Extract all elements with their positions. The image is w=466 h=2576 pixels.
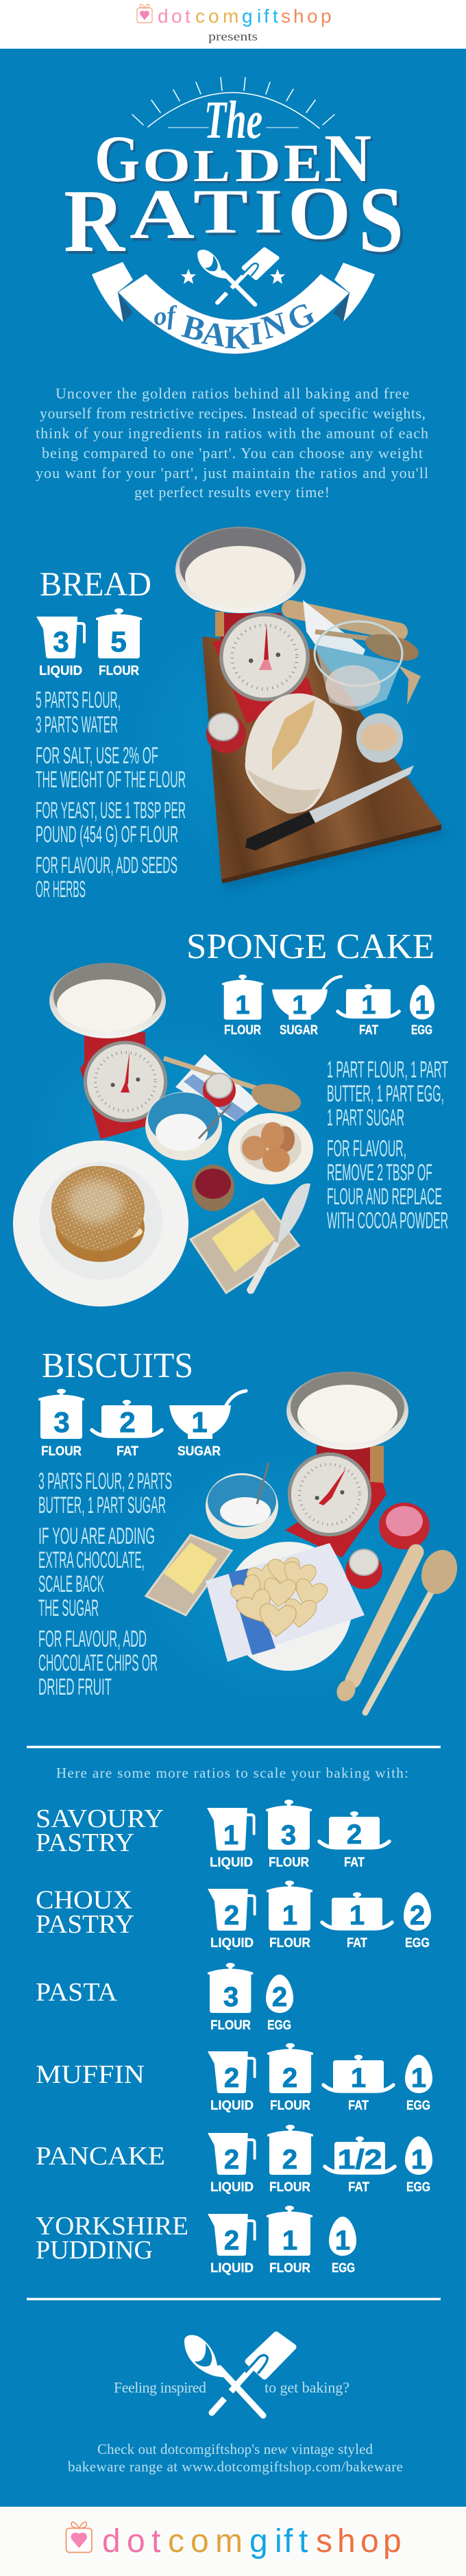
plate <box>225 1542 352 1671</box>
brand logo text: gift <box>242 5 278 27</box>
row: pancake: FAT <box>348 2180 369 2195</box>
scale <box>84 1032 145 1070</box>
row: muffin: LIQUID <box>210 2099 254 2113</box>
row: yorkshire pudding: FLOUR <box>269 2261 310 2276</box>
row: muffin: MUFFIN <box>36 2060 145 2089</box>
row: yorkshire pudding: 1 <box>335 2226 350 2256</box>
panel: biscuits: 3 PARTS FLOUR, 2 PARTS <box>38 1468 172 1494</box>
RATIOS: I <box>254 176 282 246</box>
of BAKING: A <box>199 315 229 355</box>
big plate <box>13 1141 188 1307</box>
heading: SPONGE CAKE <box>186 927 434 966</box>
row: pancake: EGG <box>406 2180 430 2195</box>
ratio icons: SUGAR <box>280 1023 318 1038</box>
row: savoury pastry: 3 <box>281 1820 296 1850</box>
row: yorkshire pudding: 2 <box>224 2226 239 2256</box>
wooden spoon and cloth <box>175 1054 260 1121</box>
blue bowl <box>206 1473 278 1539</box>
rolling pin, cloth and spoon <box>291 609 399 632</box>
intro paragraph: Uncover the golden ratios behind all baking and free <box>56 385 409 402</box>
icon: crossed spoon and spatula <box>197 250 277 305</box>
panel: biscuits: BUTTER, 1 PART SUGAR <box>38 1492 166 1518</box>
of BAKING: G <box>282 295 321 339</box>
row: yorkshire pudding <box>36 2206 356 2276</box>
row: savoury pastry: 1 <box>223 1820 238 1850</box>
row: muffin: FLOUR <box>270 2099 310 2113</box>
brand logo text: gift <box>249 2523 308 2560</box>
ratio icons: FLOUR <box>41 1444 82 1459</box>
ratio icons: 1 <box>415 991 430 1020</box>
brand logo text: dot <box>158 5 191 27</box>
row: choux pastry: EGG <box>405 1936 430 1951</box>
ratio icons: LIQUID <box>39 664 82 678</box>
icon: crossed spoon and spatula <box>184 2335 293 2416</box>
row: pasta: PASTA <box>36 1978 118 2007</box>
check out text: Check out dotcomgiftshop's new vintage styled <box>97 2441 373 2457</box>
instructions: THE SUGAR <box>38 1595 99 1621</box>
row: yorkshire pudding: YORKSHIRE <box>36 2212 188 2241</box>
intro paragraph: yourself from restrictive recipes. Instead of specific weights, <box>40 405 426 422</box>
ratio icons: 3 <box>53 625 69 658</box>
of BAKING: I <box>247 315 264 353</box>
loaf <box>245 693 342 813</box>
instructions: POUND (454 G) OF FLOUR <box>36 822 178 848</box>
row: choux pastry: 2 <box>224 1900 239 1931</box>
row: muffin: 2 <box>224 2063 239 2093</box>
RATIOS: T <box>193 176 248 246</box>
GOLDEN: N <box>324 120 371 196</box>
ratio icons <box>36 608 142 678</box>
row: pasta: EGG <box>267 2018 291 2033</box>
of BAKING: of <box>153 301 179 331</box>
GOLDEN: O <box>143 139 191 192</box>
row: muffin: FAT <box>348 2099 369 2113</box>
row: choux pastry <box>36 1881 431 1951</box>
row: pasta: 2 <box>272 1982 287 2012</box>
ratio icons: 1 <box>361 991 376 1020</box>
instructions <box>36 687 186 903</box>
tea towel <box>206 1543 365 1662</box>
sunburst arc and rays <box>132 77 334 128</box>
cutters <box>379 1503 430 1549</box>
instructions: OR HERBS <box>36 876 86 903</box>
row: pasta <box>36 1963 293 2033</box>
row: savoury pastry: 2 <box>347 1820 362 1850</box>
sponge <box>56 1193 145 1262</box>
row: pancake: 2 <box>224 2145 239 2175</box>
feeling inspired: Feeling inspired <box>114 2378 206 2396</box>
divider <box>27 1746 441 1748</box>
row: muffin <box>36 2043 432 2113</box>
ratio icons <box>222 975 434 1038</box>
more ratios intro: Here are some more ratios to scale your baking with: <box>56 1765 408 1781</box>
blue sugar bowl <box>145 1092 222 1160</box>
row: savoury pastry: PASTRY <box>36 1828 134 1857</box>
stars <box>181 269 285 284</box>
intro paragraph: you want for your 'part', just maintain the ratios and you'll <box>36 464 428 481</box>
biscuits <box>228 1557 329 1638</box>
icon: gift logo <box>137 4 152 23</box>
brand logo text: com <box>195 5 238 27</box>
ratio icons: 5 <box>110 625 127 658</box>
row: savoury pastry <box>36 1800 389 1870</box>
row: muffin: 2 <box>282 2063 297 2093</box>
row: pancake: 1/2 <box>337 2145 382 2175</box>
ratio icons: 3 <box>53 1406 70 1438</box>
brand logo text: com <box>168 2523 243 2560</box>
photo: biscuit ingredients <box>146 1372 463 1713</box>
instructions: 3 PARTS WATER <box>36 712 118 738</box>
brand logo text: shop <box>281 5 332 27</box>
row: savoury pastry: SAVOURY <box>36 1804 164 1833</box>
row: choux pastry: FAT <box>347 1936 367 1951</box>
divider <box>27 2298 441 2300</box>
timer <box>203 1074 236 1107</box>
row: yorkshire pudding: LIQUID <box>210 2261 254 2276</box>
header panel <box>0 0 466 49</box>
row: pancake: LIQUID <box>210 2180 254 2195</box>
instructions <box>327 1057 448 1234</box>
intro paragraph: get perfect results every time! <box>134 484 330 501</box>
scale <box>215 613 288 645</box>
jam jar <box>192 1165 234 1211</box>
row: pancake: FLOUR <box>269 2180 310 2195</box>
of BAKING: B <box>179 308 209 349</box>
ratio icons: FAT <box>116 1444 138 1459</box>
glass jug <box>315 645 401 711</box>
ratio icons <box>38 1389 246 1459</box>
panel: bread: THE WEIGHT OF THE FLOUR <box>36 767 186 793</box>
GOLDEN: L <box>193 141 230 191</box>
scale <box>317 1446 384 1488</box>
instructions: DRIED FRUIT <box>38 1674 112 1700</box>
title lockup <box>64 77 404 357</box>
ribbon banner <box>92 262 375 357</box>
ratio icons: FLOUR <box>224 1023 261 1038</box>
panel: bread <box>36 527 466 919</box>
timer <box>345 1552 382 1589</box>
row: choux pastry: 2 <box>410 1900 425 1931</box>
panel: biscuits <box>38 1346 466 1756</box>
GOLDEN: E <box>284 133 322 193</box>
footer panel <box>0 2507 466 2576</box>
to get baking: to get baking? <box>265 2378 350 2396</box>
call to action <box>68 2335 403 2474</box>
brand logo text: shop <box>316 2523 402 2560</box>
The: The <box>204 90 262 150</box>
of BAKING: K <box>224 319 251 357</box>
RATIOS: A <box>130 175 195 254</box>
ratio icons: SUGAR <box>177 1444 221 1459</box>
photo: sponge cake ingredients <box>13 963 313 1307</box>
intro paragraph <box>36 385 428 501</box>
butter dish <box>146 1535 232 1615</box>
row: pancake: 2 <box>282 2145 297 2175</box>
brand logo text: dot <box>102 2523 160 2560</box>
RATIOS <box>64 167 404 272</box>
instructions: FOR SALT, USE 2% OF <box>36 743 158 769</box>
of BAKING <box>153 295 321 357</box>
GOLDEN: G <box>95 122 140 195</box>
row: choux pastry: LIQUID <box>210 1936 254 1951</box>
row: savoury pastry: FLOUR <box>269 1856 309 1870</box>
row: savoury pastry: LIQUID <box>210 1856 253 1870</box>
heading: BISCUITS <box>42 1346 193 1385</box>
row: choux pastry: 1 <box>350 1900 365 1931</box>
row: pasta: FLOUR <box>210 2018 251 2033</box>
row: yorkshire pudding: PUDDING <box>36 2236 153 2265</box>
knife <box>309 765 414 823</box>
panel: bread: FOR YEAST, USE 1 TBSP PER <box>36 798 186 824</box>
row: pancake: 1 <box>411 2145 426 2175</box>
wooden spoon <box>365 1591 432 1713</box>
instructions <box>38 1468 172 1700</box>
row: choux pastry: FLOUR <box>269 1936 310 1951</box>
ratio icons: 1 <box>235 991 250 1020</box>
timer <box>206 715 246 753</box>
ratio icons: FAT <box>359 1023 378 1038</box>
row: muffin: 1 <box>351 2063 366 2093</box>
RATIOS: R <box>64 171 125 271</box>
ratio icons: 1 <box>191 1406 208 1438</box>
GOLDEN: D <box>235 139 281 191</box>
egg plate <box>228 1113 313 1184</box>
row: savoury pastry: FAT <box>344 1856 365 1870</box>
panel: sponge cake <box>0 927 448 1324</box>
salt dish <box>356 713 403 763</box>
ratio icons: 1 <box>292 991 307 1020</box>
instructions: 5 PARTS FLOUR, <box>36 687 121 713</box>
presents: presents <box>208 29 258 43</box>
GOLDEN <box>95 120 371 196</box>
ratio icons: 2 <box>119 1406 136 1438</box>
row: choux pastry: 1 <box>282 1900 297 1931</box>
instructions: IF YOU ARE ADDING <box>38 1523 155 1549</box>
row: pancake: PANCAKE <box>36 2142 165 2171</box>
icon: gift logo <box>66 2522 92 2553</box>
row: pasta: 3 <box>223 1982 238 2012</box>
row: choux pastry: PASTRY <box>36 1910 134 1939</box>
panel: bread: FOR FLAVOUR, ADD SEEDS <box>36 852 177 879</box>
instructions: EXTRA CHOCOLATE, <box>38 1547 145 1573</box>
instructions: SCALE BACK <box>38 1571 104 1597</box>
butter dish and knife <box>191 1199 299 1293</box>
call to action: bakeware range at www.dotcomgiftshop.com/bakeware <box>68 2458 403 2474</box>
row: pancake <box>36 2125 432 2195</box>
of BAKING: N <box>258 305 291 346</box>
RATIOS: O <box>288 171 351 255</box>
instructions: CHOCOLATE CHIPS OR <box>38 1650 158 1676</box>
instructions: FOR FLAVOUR, ADD <box>38 1626 147 1652</box>
row: choux pastry: CHOUX <box>36 1886 132 1915</box>
ratio icons: FLOUR <box>99 664 139 678</box>
rolling pin <box>353 1552 416 1680</box>
photo: bread ingredients on a board <box>175 527 445 892</box>
heading: BREAD <box>40 564 151 603</box>
intro paragraph: think of your ingredients in ratios with the amount of each <box>36 425 428 442</box>
row: yorkshire pudding: EGG <box>332 2261 355 2276</box>
row: muffin: 1 <box>411 2063 426 2093</box>
intro paragraph: being compared to one 'part'. You can choose any weight <box>42 444 423 462</box>
row: yorkshire pudding: 1 <box>282 2226 297 2256</box>
RATIOS: S <box>358 167 404 272</box>
row: muffin: EGG <box>406 2099 430 2113</box>
ratio icons: EGG <box>411 1023 432 1038</box>
